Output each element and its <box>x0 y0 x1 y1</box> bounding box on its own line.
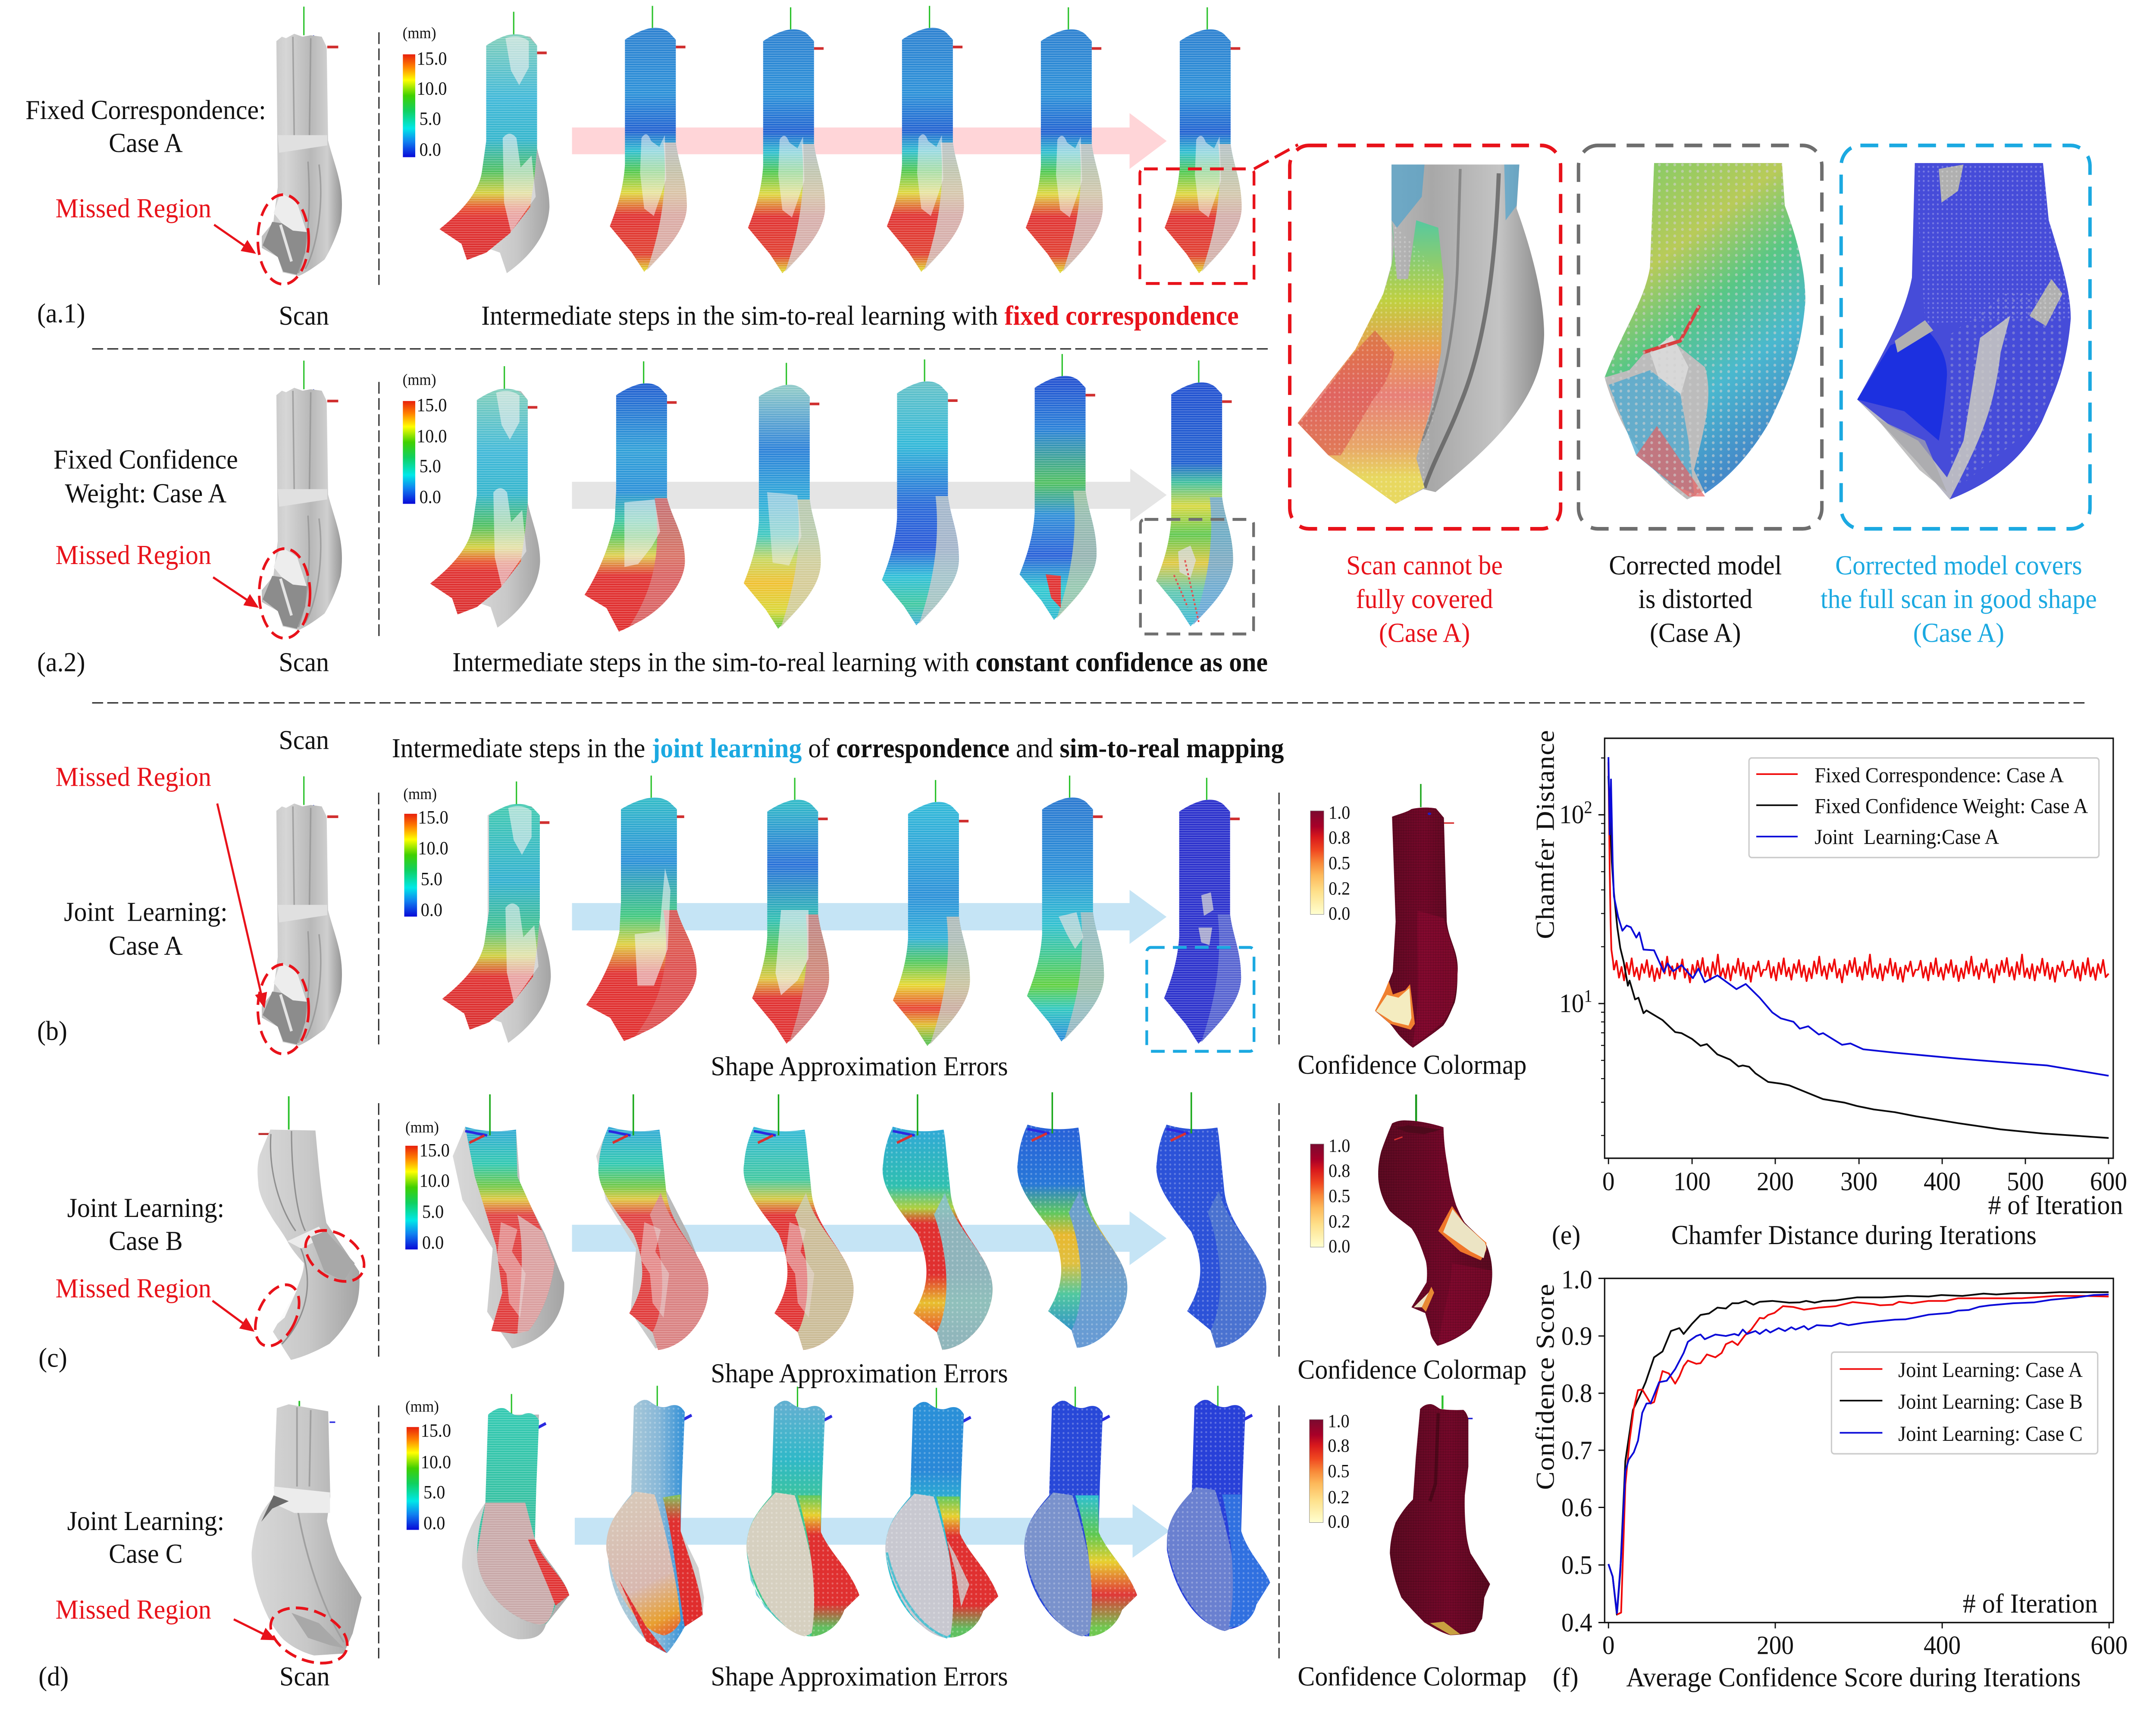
panel tag a.1: (a.1) <box>37 298 85 329</box>
confidence model d <box>1390 1395 1490 1635</box>
model d step 4 <box>885 1388 998 1637</box>
missed region label a.1: Missed Region <box>56 193 211 224</box>
colour bar a.2: 5.0 <box>420 456 441 476</box>
row d label: Case C <box>109 1539 183 1569</box>
confidence model c <box>1378 1094 1492 1346</box>
model b step 3 <box>752 778 829 1044</box>
detail box blue <box>1147 947 1254 1051</box>
colour bar a.2: 15.0 <box>417 395 447 415</box>
model c step 3 <box>743 1094 853 1350</box>
caption a.1: Intermediate steps in the sim-to-real learning with fixed correspondence <box>481 301 1239 331</box>
panel tag f: (f) <box>1553 1662 1579 1693</box>
row a.1 labels: fixed correspondence <box>25 95 266 158</box>
panel: blue detail, good model <box>1841 145 2090 529</box>
confidence bar c: 0.8 <box>1329 1160 1350 1181</box>
divider <box>92 348 1268 349</box>
row c label <box>67 1193 224 1256</box>
x ticks e: 600 <box>2090 1167 2127 1196</box>
model c step 2 <box>596 1094 708 1350</box>
colour bar a.1: 0.0 <box>420 139 441 160</box>
icon: grey scan b <box>262 776 342 1046</box>
colour bar d: 5.0 <box>423 1482 445 1502</box>
colour bar c: (mm) <box>405 1118 439 1136</box>
confidence bar d: 1.0 <box>1328 1411 1350 1431</box>
caption red panel: Scan cannot be <box>1346 550 1503 580</box>
model c step 5 <box>1017 1092 1127 1348</box>
colour bar a.2: 0.0 <box>420 486 441 507</box>
caption grey panel: is distorted <box>1638 584 1752 615</box>
heading joint learning: Intermediate steps in the joint learning of correspondence and sim-to-real mapping <box>392 733 1284 763</box>
missed region ellipse b <box>258 964 309 1054</box>
confidence bar b: 0.0 <box>1329 903 1350 924</box>
connector to red detail panel <box>1254 145 1298 169</box>
colour bar a.1: 5.0 <box>420 108 441 129</box>
arrow to missed region a.1 <box>214 225 254 253</box>
colour bar a.1: (mm) <box>403 24 436 42</box>
confidence bar d: 0.0 <box>1328 1511 1350 1532</box>
model d step 6 <box>1167 1386 1270 1631</box>
colour bar d: (mm) <box>405 1397 439 1415</box>
caption blue panel: the full scan in good shape <box>1821 584 2097 615</box>
confidence caption c: Confidence Colormap <box>1297 1355 1526 1385</box>
model a.1 step 3 <box>748 7 825 273</box>
row d label <box>67 1506 224 1569</box>
y ticks e <box>1559 797 1592 1018</box>
row c label: Joint Learning: <box>67 1193 224 1223</box>
colour bar d: 10.0 <box>421 1452 451 1472</box>
missed region label b: Missed Region <box>56 762 211 792</box>
x ticks e: 400 <box>1924 1167 1961 1196</box>
row c label: Case B <box>109 1226 183 1256</box>
captions d: Shape Approximation Errors <box>711 1662 1008 1692</box>
row d label: Joint Learning: <box>67 1506 224 1536</box>
y ticks e: 10 <box>1559 988 1584 1018</box>
confidence bar b <box>1310 802 1350 924</box>
x ticks e: 200 <box>1757 1167 1794 1196</box>
vertical divider c <box>378 1103 379 1357</box>
colour bar b: 15.0 <box>418 807 448 828</box>
x ticks f: 200 <box>1757 1631 1794 1660</box>
colour bar b: 10.0 <box>418 838 448 858</box>
x ticks f: 600 <box>2090 1631 2128 1660</box>
vertical divider b <box>378 793 379 1044</box>
colour bar d: 0.0 <box>423 1513 445 1533</box>
x ticks e: 500 <box>2007 1167 2044 1196</box>
divider <box>92 702 2084 703</box>
model a.1 step 5 <box>1026 7 1103 273</box>
legend e: Joint Learning:Case A <box>1814 825 1999 849</box>
arrow: blue progress arrow b <box>572 890 1166 944</box>
panel tag d: (d) <box>38 1662 69 1692</box>
x ticks e: 300 <box>1840 1167 1877 1196</box>
caption grey panel: Corrected model <box>1609 550 1782 580</box>
legend e: Fixed Confidence Weight: Case A <box>1814 794 2088 818</box>
model a.1 step 2 <box>610 6 687 272</box>
detail box grey <box>1141 519 1253 634</box>
row a.2 labels: fixed confidence weight <box>53 445 238 508</box>
model c step 4 <box>883 1094 993 1350</box>
curves f <box>1608 1292 2109 1615</box>
confidence bar b: 1.0 <box>1329 802 1350 823</box>
model c step 6 <box>1156 1092 1266 1348</box>
icon: grey scan c <box>257 1096 360 1360</box>
y ticks f: 0.7 <box>1561 1436 1592 1465</box>
y ticks e: 1 <box>1584 986 1592 1006</box>
row a.2 labels: fixed confidence weight: Weight: Case A <box>65 478 227 508</box>
captions c: Shape Approximation Errors <box>711 1358 1008 1389</box>
arrow to missed region d <box>234 1619 274 1639</box>
y ticks f: 0.4 <box>1561 1608 1592 1637</box>
model c step 1 <box>453 1094 564 1348</box>
row b label: Joint Learning: <box>64 897 228 927</box>
y ticks f: 1.0 <box>1561 1265 1592 1294</box>
x axis label e: # of Iteration <box>1988 1190 2123 1220</box>
colour bar c: 0.0 <box>422 1232 444 1253</box>
icon: grey scan d <box>252 1401 362 1656</box>
colour bar c: 5.0 <box>422 1201 444 1222</box>
confidence bar b: 0.2 <box>1329 878 1350 899</box>
scan caption a.1: Scan <box>279 301 329 331</box>
arrow to missed region b <box>217 803 264 1006</box>
y ticks f: 0.6 <box>1561 1493 1592 1522</box>
caption grey panel: (Case A) <box>1650 618 1741 648</box>
arrow: pink progress arrow a.1 <box>572 113 1167 169</box>
confidence model b <box>1375 784 1458 1048</box>
caption red panel: (Case A) <box>1379 618 1470 648</box>
x ticks f: 400 <box>1924 1631 1961 1660</box>
confidence bar c: 0.2 <box>1329 1211 1350 1232</box>
model a.1 step 1 <box>439 12 549 273</box>
curves e <box>1608 757 2109 1138</box>
detail box red <box>1140 169 1254 283</box>
legend f: Joint Learning: Case C <box>1898 1422 2083 1446</box>
x ticks e: 0 <box>1602 1167 1615 1196</box>
model d step 3 <box>746 1386 859 1637</box>
colour bar c: 10.0 <box>420 1170 450 1191</box>
icon: grey scan a.1 <box>262 6 342 276</box>
y ticks f <box>1561 1265 1592 1637</box>
legend f: Joint Learning: Case A <box>1898 1358 2083 1382</box>
missed region label c: Missed Region <box>56 1273 211 1304</box>
caption red panel <box>1346 550 1503 648</box>
confidence bar c: 0.0 <box>1329 1236 1350 1256</box>
model d step 2 <box>606 1386 704 1653</box>
chart title f: Average Confidence Score during Iterations <box>1626 1662 2081 1693</box>
missed region ellipse c upper <box>297 1220 373 1292</box>
missed region ellipse c lower <box>246 1277 308 1354</box>
confidence caption d: Confidence Colormap <box>1297 1662 1526 1692</box>
model a.2 step 1 <box>430 366 540 627</box>
colour bar a.2: 10.0 <box>417 426 447 446</box>
legend e: Fixed Correspondence: Case A <box>1814 763 2064 787</box>
caption blue panel <box>1821 550 2097 648</box>
x ticks e <box>1602 1167 2127 1196</box>
y ticks f: 0.9 <box>1561 1321 1592 1351</box>
line chart f: confidence score <box>1531 1265 2128 1660</box>
captions b: Shape Approximation Errors <box>711 1051 1008 1082</box>
icon: grey scan a.2 <box>262 361 342 630</box>
legend f: Joint Learning: Case B <box>1898 1390 2083 1414</box>
colour bar b: (mm) <box>403 785 437 803</box>
panel: red detail, scan not covered <box>1290 145 1561 529</box>
missed region ellipse d <box>263 1597 354 1674</box>
missed region label a.2: Missed Region <box>56 540 211 570</box>
row a.1 labels: fixed correspondence: Case A <box>109 128 183 158</box>
colour bar b: 0.0 <box>421 900 442 920</box>
caption blue panel: Corrected model covers <box>1835 550 2082 580</box>
caption a.2: Intermediate steps in the sim-to-real learning with constant confidence as one <box>452 647 1268 677</box>
x ticks e: 100 <box>1673 1167 1711 1196</box>
legend e <box>1749 758 2099 858</box>
confidence bar b: 0.8 <box>1329 827 1350 848</box>
confidence caption b: Confidence Colormap <box>1297 1050 1526 1080</box>
colour bar d <box>405 1397 451 1533</box>
confidence bar c: 1.0 <box>1329 1135 1350 1156</box>
model a.2 step 5 <box>1019 354 1097 620</box>
model a.2 step 6 <box>1156 361 1233 626</box>
panel tag e: (e) <box>1552 1220 1580 1251</box>
row a.1 labels: fixed correspondence: Fixed Correspondence: <box>25 95 266 125</box>
confidence bar c <box>1310 1135 1350 1256</box>
model b step 6 <box>1164 778 1241 1044</box>
arrow: grey progress arrow a.2 <box>572 469 1167 521</box>
y ticks e: 2 <box>1584 797 1592 817</box>
panel: grey detail, distorted model <box>1579 145 1822 529</box>
x ticks f <box>1602 1631 2128 1660</box>
x axis label f: # of Iteration <box>1963 1589 2098 1619</box>
legend f <box>1831 1352 2098 1454</box>
arrow: blue progress arrow c <box>572 1211 1166 1265</box>
colour bar a.1: 10.0 <box>417 78 447 99</box>
model a.1 step 4 <box>887 6 964 272</box>
panel tag b: (b) <box>37 1016 67 1046</box>
row b label: Case A <box>109 931 183 961</box>
y ticks f: 0.5 <box>1561 1550 1592 1580</box>
model d step 5 <box>1024 1386 1137 1637</box>
model b step 2 <box>586 775 696 1041</box>
scan caption a.2: Scan <box>279 647 329 677</box>
colour bar c: 15.0 <box>420 1140 450 1160</box>
panel tag c: (c) <box>38 1343 67 1373</box>
arrow to missed region c <box>213 1301 253 1330</box>
colour bar a.1 <box>403 24 447 160</box>
arrow: blue progress arrow d <box>575 1504 1170 1558</box>
panel tag a.2: (a.2) <box>37 647 85 677</box>
missed region ellipse a.2 <box>259 549 310 638</box>
confidence bar b: 0.5 <box>1329 853 1350 873</box>
scan caption d: Scan <box>279 1662 330 1692</box>
model b step 4 <box>893 780 970 1046</box>
caption grey panel <box>1609 550 1782 648</box>
model a.1 step 6 <box>1165 7 1241 273</box>
caption blue panel: (Case A) <box>1913 618 2004 648</box>
confidence bar d: 0.5 <box>1328 1461 1350 1481</box>
model d step 1 <box>462 1394 569 1639</box>
y axis label f: Confidence Score <box>1531 1283 1560 1490</box>
line chart e: chamfer distance <box>1531 730 2127 1220</box>
missed region ellipse a.1 <box>258 194 309 284</box>
caption red panel: fully covered <box>1356 584 1493 615</box>
missed region label d: Missed Region <box>56 1595 211 1625</box>
model a.2 step 2 <box>585 361 685 632</box>
colour bar d: 15.0 <box>421 1420 451 1441</box>
colour bar b <box>403 785 448 920</box>
model a.2 step 4 <box>882 360 959 625</box>
confidence bar d: 0.8 <box>1328 1436 1350 1456</box>
row b label <box>64 897 228 961</box>
model b step 1 <box>442 781 551 1043</box>
model a.2 step 3 <box>744 363 821 629</box>
model b step 5 <box>1027 775 1104 1041</box>
scan caption row b: Scan <box>279 725 329 756</box>
colour bar a.2 <box>403 370 447 507</box>
confidence bar d <box>1310 1411 1350 1532</box>
colour bar a.1: 15.0 <box>417 48 447 69</box>
confidence bar c: 0.5 <box>1329 1185 1350 1206</box>
confidence bar d: 0.2 <box>1328 1487 1350 1507</box>
row a.2 labels: fixed confidence weight: Fixed Confidence <box>53 445 238 475</box>
arrow to missed region a.2 <box>213 577 257 607</box>
x ticks f: 0 <box>1602 1631 1615 1660</box>
colour bar a.2: (mm) <box>403 370 436 389</box>
chart title e: Chamfer Distance during Iterations <box>1671 1220 2037 1251</box>
colour bar c <box>405 1118 450 1253</box>
y ticks e: 10 <box>1559 800 1584 829</box>
vertical divider d <box>378 1405 379 1659</box>
colour bar b: 5.0 <box>421 869 442 889</box>
y axis label e: Chamfer Distance <box>1531 730 1560 939</box>
y ticks f: 0.8 <box>1561 1379 1592 1408</box>
